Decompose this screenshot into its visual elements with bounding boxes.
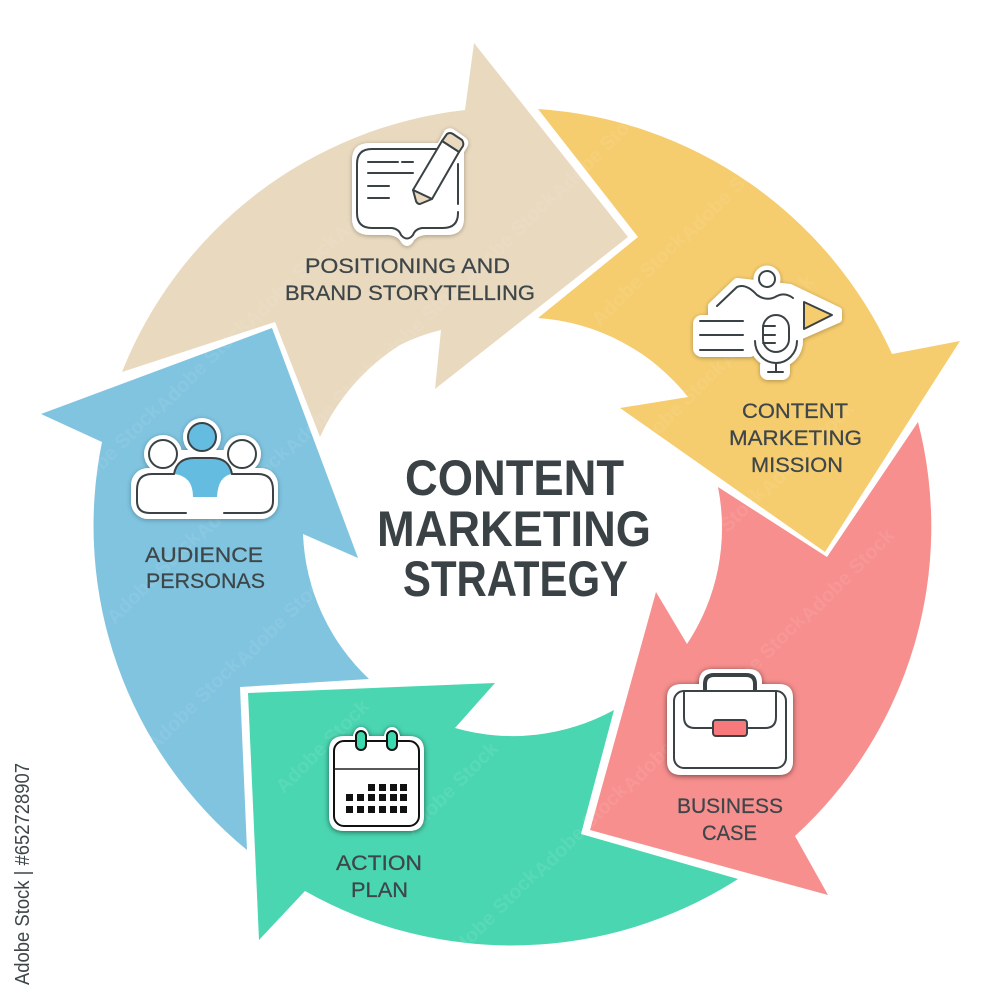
label: content marketing mission: MISSION bbox=[751, 454, 843, 477]
watermark: Adobe Stock bbox=[272, 695, 374, 798]
watermark: Adobe Stock bbox=[63, 399, 165, 502]
title: MARKETING bbox=[377, 501, 651, 557]
label: business case: CASE bbox=[702, 822, 757, 845]
watermark: Adobe Stock bbox=[708, 609, 810, 712]
watermark: Adobe Stock bbox=[103, 526, 205, 629]
watermark: Adobe Stock bbox=[677, 143, 779, 246]
label: audience personas: AUDIENCE bbox=[145, 544, 263, 567]
watermark: Adobe Stock bbox=[143, 653, 245, 756]
watermark: Adobe Stock bbox=[548, 101, 650, 204]
watermark: Adobe Stock bbox=[588, 228, 690, 331]
label: content marketing mission: MARKETING bbox=[729, 427, 862, 450]
arrow: positioning and brand storytelling bbox=[122, 43, 628, 437]
label: business case bbox=[677, 795, 783, 845]
title bbox=[377, 450, 651, 607]
label: action plan: PLAN bbox=[351, 879, 408, 902]
title: CONTENT bbox=[405, 450, 624, 506]
label: positioning and brand storytelling: BRAND STORYTELLING bbox=[285, 282, 535, 305]
arrow: business case bbox=[590, 422, 931, 895]
label: positioning and brand storytelling bbox=[285, 255, 535, 305]
arrow: content marketing mission bbox=[538, 109, 960, 552]
watermark: Adobe Stock bbox=[797, 524, 899, 627]
watermark: Adobe Stock bbox=[530, 779, 632, 882]
watermark: Adobe Stock bbox=[717, 270, 819, 373]
icon: content mission video and microphone bbox=[693, 266, 838, 380]
watermark: Adobe Stock bbox=[757, 397, 859, 500]
label: audience personas bbox=[145, 544, 265, 593]
arrow: action plan bbox=[248, 683, 738, 945]
icon: note and pencil bbox=[352, 128, 468, 246]
watermark: Adobe Stock bbox=[152, 314, 254, 417]
label: business case: BUSINESS bbox=[677, 795, 783, 818]
watermark: Adobe Stock bbox=[668, 482, 770, 585]
watermark bbox=[63, 101, 899, 967]
watermark: Adobe Stock bbox=[201, 102, 303, 205]
watermark: Adobe Stock bbox=[628, 355, 730, 458]
watermark: Adobe Stock bbox=[330, 144, 432, 247]
watermark: Adobe Stock bbox=[370, 271, 472, 374]
label: action plan: ACTION bbox=[336, 852, 422, 875]
watermark: Adobe Stock bbox=[232, 568, 334, 671]
watermark: Adobe Stock bbox=[241, 229, 343, 332]
label: positioning and brand storytelling: POSITIONING AND bbox=[305, 255, 510, 278]
watermark: Adobe Stock bbox=[281, 356, 383, 459]
icon: audience people bbox=[131, 418, 278, 519]
watermark: Adobe Stock bbox=[192, 441, 294, 544]
icon: briefcase bbox=[667, 669, 793, 775]
stock credit: Adobe Stock | #652728907 bbox=[12, 763, 34, 985]
watermark: Adobe Stock bbox=[619, 694, 721, 797]
arrow: audience personas bbox=[41, 328, 369, 850]
watermark: Adobe Stock bbox=[401, 737, 503, 840]
label: audience personas: PERSONAS bbox=[146, 570, 265, 593]
label: content marketing mission bbox=[729, 400, 862, 477]
title: STRATEGY bbox=[403, 551, 628, 607]
label: action plan bbox=[336, 852, 422, 902]
watermark: Adobe Stock bbox=[112, 187, 214, 290]
watermark: Adobe Stock bbox=[459, 186, 561, 289]
label: content marketing mission: CONTENT bbox=[742, 400, 848, 423]
watermark: Adobe Stock bbox=[441, 864, 543, 967]
icon: calendar bbox=[329, 727, 424, 831]
